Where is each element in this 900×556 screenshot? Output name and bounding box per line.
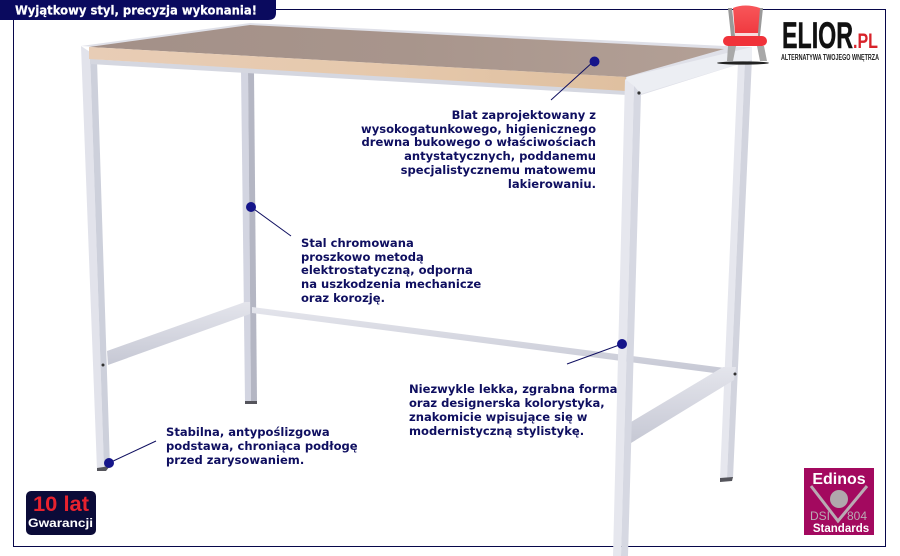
callout text: Stabilna, antypoślizgowa — [166, 425, 330, 439]
badge: Edinos standards — [804, 468, 874, 535]
callout text: Blat zaprojektowany z — [452, 108, 596, 122]
right side rail — [631, 367, 736, 443]
callout text: wysokogatunkowego, higienicznego — [361, 122, 596, 136]
callout text: Niezwykle lekka, zgrabna forma — [409, 382, 617, 396]
back right leg — [720, 58, 752, 482]
callout text: podstawa, chroniąca podłogę — [166, 439, 358, 453]
callout leader — [246, 202, 291, 236]
callout text — [361, 108, 596, 191]
callout text: antystatycznych, poddanemu — [404, 149, 596, 163]
callout text: elektrostatyczną, odporna — [301, 263, 473, 277]
callout text: oraz designerska kolorystyka, — [409, 396, 605, 410]
callout text: przed zarysowaniem. — [166, 453, 304, 467]
callout text: lakierowaniu. — [508, 177, 596, 191]
badge: Edinos standards: Edinos — [812, 471, 866, 488]
banner: headline: Wyjątkowy styl, precyzja wykonania! — [15, 4, 257, 18]
tabletop front edge — [89, 47, 626, 91]
callout text — [166, 425, 358, 467]
callout leader — [104, 441, 156, 468]
callout text: oraz korozję. — [301, 291, 385, 305]
icon: red chair — [717, 6, 769, 65]
front left leg — [81, 46, 110, 471]
badge: 10 year warranty — [26, 491, 96, 535]
back left leg — [241, 70, 257, 404]
callout: tabletop — [361, 56, 600, 191]
callout text: specjalistycznemu matowemu — [401, 163, 596, 177]
logo: Elior.pl: .PL — [853, 30, 878, 53]
left rail bolt — [102, 364, 104, 366]
back stretcher rail — [252, 307, 725, 374]
callout text: modernistyczną stylistykę. — [409, 424, 584, 438]
badge: Edinos standards: Standards — [813, 523, 869, 535]
callout: steel — [246, 202, 481, 305]
callout leader — [551, 56, 600, 100]
front right leg — [613, 79, 641, 556]
callout text: znakomicie wpisujące się w — [409, 410, 588, 424]
corner bolt — [637, 91, 641, 95]
callout text — [301, 236, 481, 305]
callout leader — [567, 339, 627, 364]
callout: form — [409, 339, 627, 438]
desk illustration — [81, 23, 752, 556]
callout text — [409, 382, 617, 438]
badge: Edinos standards: 804 — [847, 509, 867, 523]
badge: 10 year warranty: 10 lat — [33, 493, 89, 516]
callout text: proszkowo metodą — [301, 250, 424, 264]
badge: 10 year warranty: Gwarancji — [28, 516, 93, 530]
front apron — [90, 59, 627, 95]
top frame rim — [81, 23, 752, 95]
callout text: drewna bukowego o właściwościach — [361, 135, 596, 149]
callout: base — [104, 425, 358, 468]
callout text: Stal chromowana — [301, 236, 414, 250]
banner: headline — [0, 0, 276, 20]
rail bolt — [734, 372, 736, 376]
badge: Edinos standards: DSI — [810, 509, 830, 523]
left side rail — [107, 302, 250, 365]
tabletop surface — [89, 25, 724, 77]
side rail under top — [627, 47, 752, 94]
logo: Elior.pl: ELIOR — [782, 15, 853, 56]
callout text: na uszkodzenia mechanicze — [301, 277, 481, 291]
